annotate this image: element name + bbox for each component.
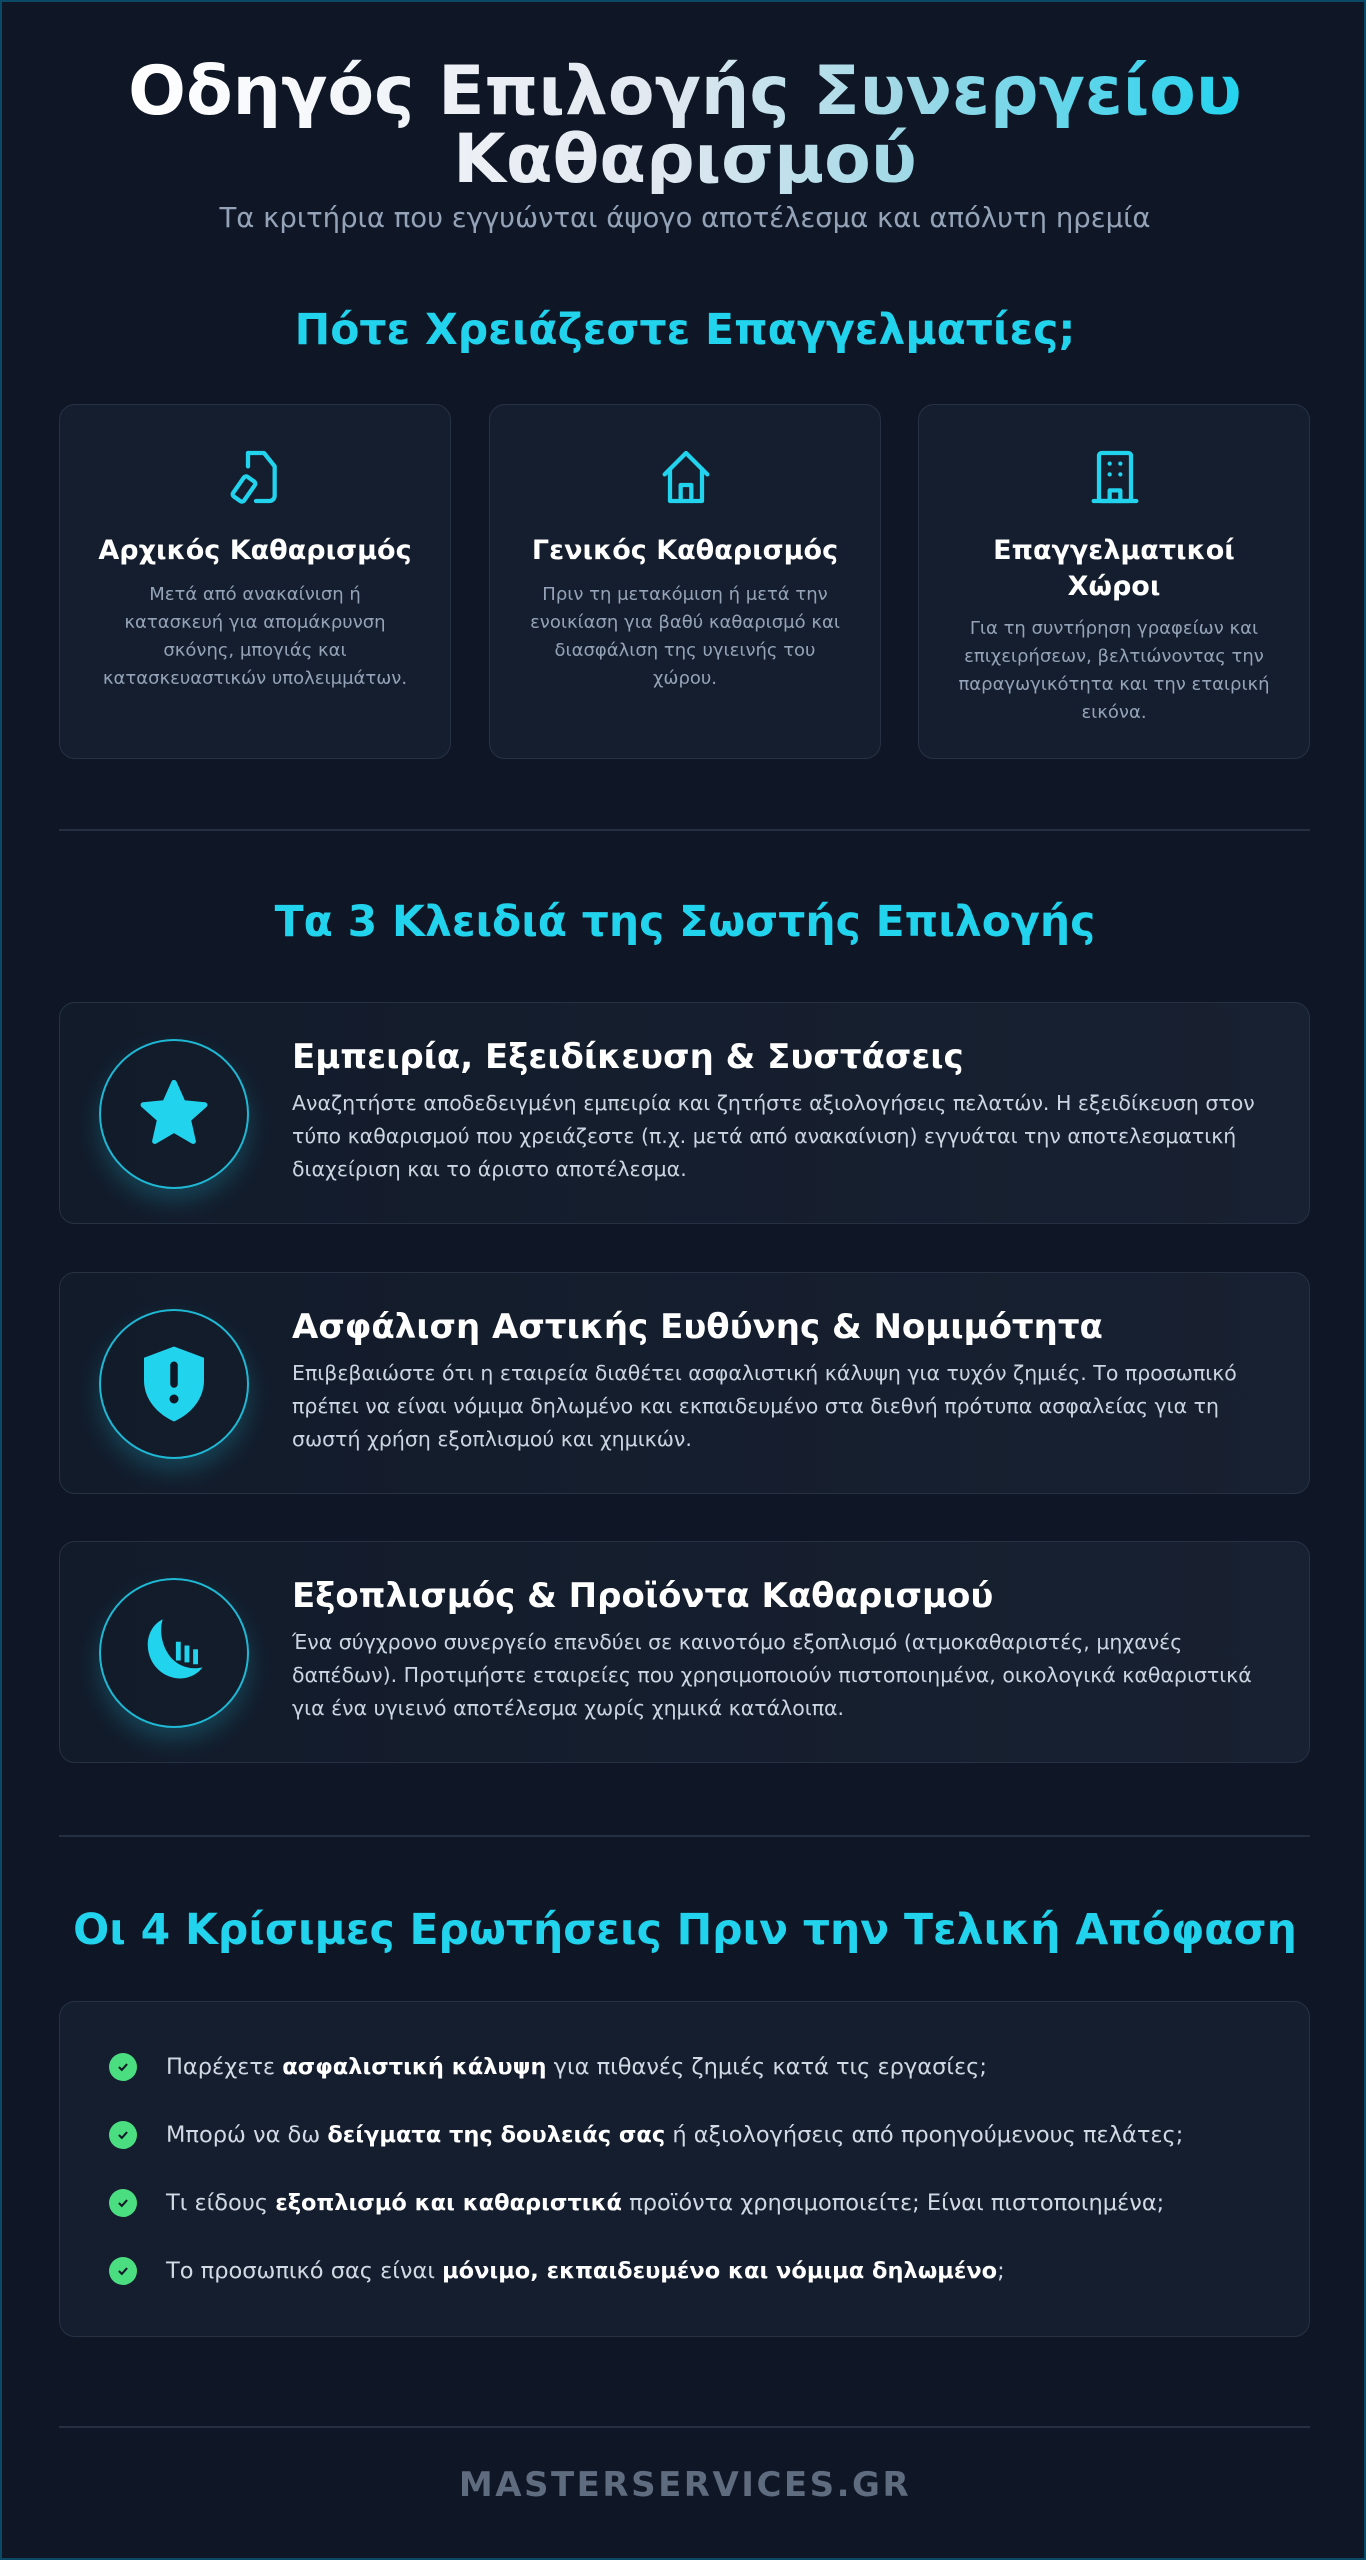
key title: Ασφάλιση Αστικής Ευθύνης & Νομιμότητα (292, 1307, 1103, 1347)
card text: κατασκευαστικών υπολειμμάτων. (103, 668, 407, 689)
card text: Μετά από ανακαίνιση ή (149, 584, 361, 605)
icon: house (662, 450, 710, 504)
card text: παραγωγικότητα και την εταιρική (958, 674, 1270, 695)
card title: Γενικός Καθαρισμός (532, 535, 838, 566)
title (128, 52, 1242, 199)
panel: professional spaces (918, 404, 1310, 759)
card text: χώρου. (653, 668, 717, 689)
key title: Εμπειρία, Εξειδίκευση & Συστάσεις (292, 1037, 964, 1077)
icon: document/brush (230, 450, 277, 504)
icon: star (99, 1039, 249, 1189)
card text: εικόνα. (1081, 702, 1147, 723)
card text: διασφάλιση της υγιεινής του (555, 640, 815, 661)
panel: insurance (59, 1272, 1310, 1494)
panel: general cleaning (489, 404, 881, 759)
key text: Αναζητήστε αποδεδειγμένη εμπειρία και ζητήστε αξιολογήσεις πελατών. Η εξειδίκευση στον τύπο καθαρισμού που χρειάζεστε (π.χ. μετά από ανακαίνιση) εγγυάται την αποτελεσματική διαχείριση και το άριστο αποτέλεσμα. (292, 1091, 1255, 1181)
question 3: Τι είδους εξοπλισμό και καθαριστικά προϊόντα χρησιμοποιείτε; Είναι πιστοποιημένα; (166, 2190, 1164, 2216)
card text: Πριν τη μετακόμιση ή μετά την (542, 584, 828, 605)
question 4: Το προσωπικό σας είναι μόνιμο, εκπαιδευμένο και νόμιμα δηλωμένο; (166, 2258, 1005, 2284)
question 1: Παρέχετε ασφαλιστική κάλυψη για πιθανές ζημιές κατά τις εργασίες; (166, 2054, 987, 2080)
footer brand: MASTERSERVICES.GR (459, 2465, 911, 2505)
card title: Αρχικός Καθαρισμός (98, 535, 412, 566)
icon: building (1092, 450, 1138, 504)
card text (530, 584, 840, 689)
heading: when you need professionals: Πότε Χρειάζεστε Επαγγελματίες; (295, 306, 1075, 355)
question 2: Μπορώ να δω δείγματα της δουλειάς σας ή αξιολογήσεις από προηγούμενους πελάτες; (166, 2122, 1183, 2148)
key title: Εξοπλισμός & Προϊόντα Καθαρισμού (292, 1576, 993, 1616)
panel: questions (59, 2001, 1310, 2337)
panel: experience (59, 1002, 1310, 1224)
card text: κατασκευή για απομάκρυνση (124, 612, 386, 633)
title: Καθαρισμού (453, 120, 917, 199)
subtitle: Τα κριτήρια που εγγυώνται άψογο αποτέλεσμα και απόλυτη ηρεμία (219, 202, 1150, 234)
card title (993, 535, 1235, 602)
icon: crescent brush (99, 1578, 249, 1728)
card text: Για τη συντήρηση γραφείων και (970, 618, 1258, 639)
title: Οδηγός Επιλογής Συνεργείου (128, 52, 1242, 131)
icon: shield (99, 1309, 249, 1459)
card text: σκόνης, μπογιάς και (163, 640, 347, 661)
heading: 3 keys: Τα 3 Κλειδιά της Σωστής Επιλογής (275, 898, 1095, 947)
card title: Χώροι (1068, 571, 1160, 602)
card text: επιχειρήσεων, βελτιώνοντας την (964, 646, 1264, 667)
key text: Επιβεβαιώστε ότι η εταιρεία διαθέτει ασφαλιστική κάλυψη για τυχόν ζημιές. Το προσωπικό πρέπει να είναι νόμιμα δηλωμένο και εκπαιδευμένο στα διεθνή πρότυπα ασφαλείας για τη σωστή χρήση εξοπλισμού και χημικών. (292, 1361, 1237, 1451)
panel: initial cleaning (59, 404, 451, 759)
card title: Επαγγελματικοί (993, 535, 1235, 566)
card text (958, 618, 1270, 723)
heading: 4 questions: Οι 4 Κρίσιμες Ερωτήσεις Πριν την Τελική Απόφαση (73, 1906, 1297, 1955)
panel: equipment (59, 1541, 1310, 1763)
card text (103, 584, 407, 689)
key text: Ένα σύγχρονο συνεργείο επενδύει σε καινοτόμο εξοπλισμό (ατμοκαθαριστές, μηχανές δαπέδων). Προτιμήστε εταιρείες που χρησιμοποιούν πιστοποιημένα, οικολογικά καθαριστικά για ένα υγιεινό αποτέλεσμα χωρίς χημικά κατάλοιπα. (292, 1630, 1252, 1720)
card text: ενοικίαση για βαθύ καθαρισμό και (530, 612, 840, 633)
